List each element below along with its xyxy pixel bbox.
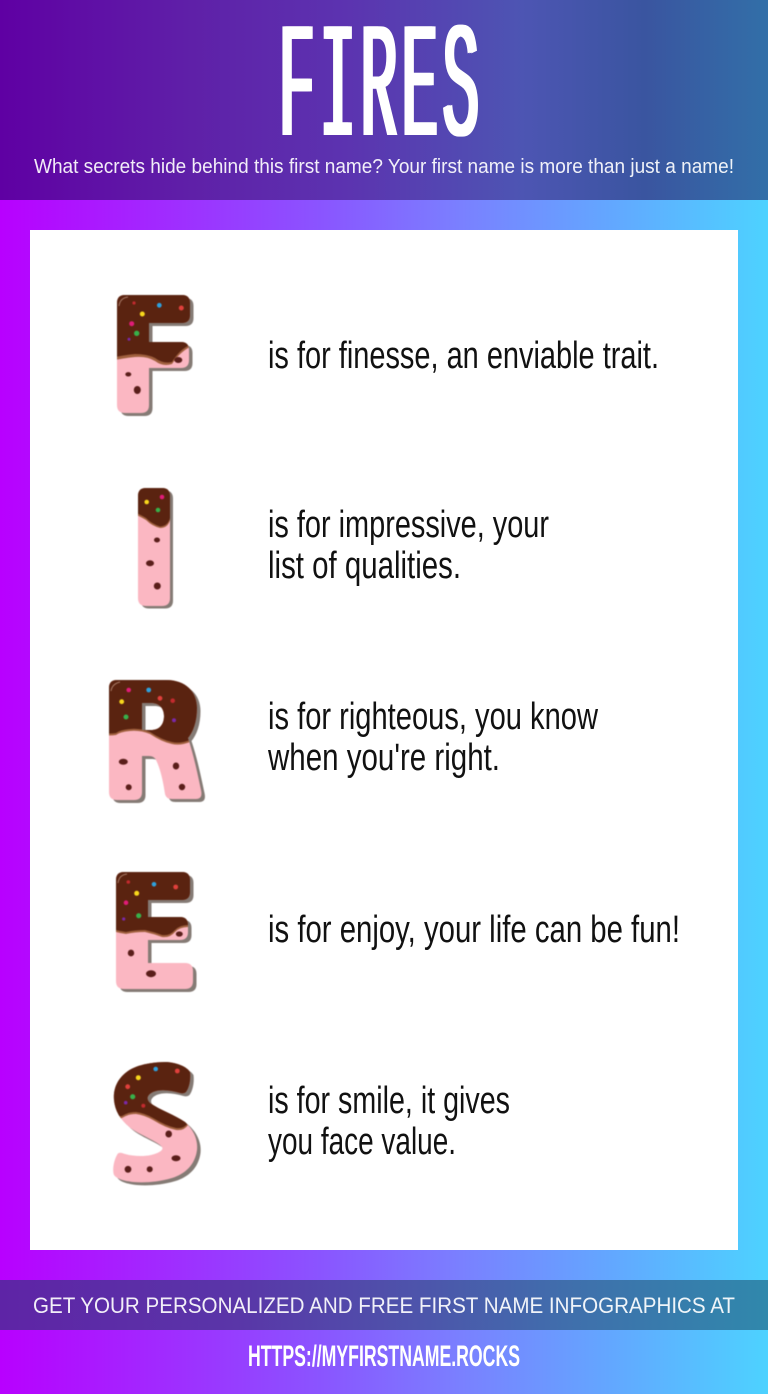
- text: I lines: is for impressive, your: [268, 504, 549, 546]
- header band: [0, 0, 768, 200]
- row: E: [115, 871, 680, 993]
- icon: chocolate letter S: [112, 1061, 202, 1186]
- text: I lines: list of qualities.: [268, 545, 461, 587]
- footer call to action: GET YOUR PERSONALIZED AND FREE FIRST NAME INFOGRAPHICS AT: [33, 1293, 735, 1318]
- row: I: [137, 487, 549, 610]
- text: S lines: you face value.: [268, 1121, 456, 1163]
- row: R: [108, 679, 598, 804]
- text: S lines: is for smile, it gives: [268, 1080, 510, 1122]
- footer url: HTTPS://MYFIRSTNAME.ROCKS: [248, 1340, 520, 1373]
- text: R lines: when you're right.: [267, 737, 500, 779]
- text: F line: is for finesse, an enviable trait.: [268, 335, 659, 377]
- footer band: [0, 1280, 768, 1330]
- subtitle: What secrets hide behind this first name? Your first name is more than just a name!: [34, 156, 734, 178]
- icon: chocolate letter F: [116, 294, 194, 417]
- icon: chocolate letter I: [137, 487, 174, 610]
- text: I lines: [268, 504, 549, 587]
- text: R lines: [267, 696, 598, 779]
- icon: chocolate letter R: [108, 679, 206, 804]
- text: S lines: [268, 1080, 510, 1163]
- white content panel: [30, 230, 738, 1250]
- row: F: [116, 294, 659, 417]
- row: S: [112, 1061, 510, 1186]
- icon: chocolate letter E: [115, 871, 198, 993]
- title: FIRES: [278, 0, 483, 184]
- text: R lines: is for righteous, you know: [268, 696, 598, 738]
